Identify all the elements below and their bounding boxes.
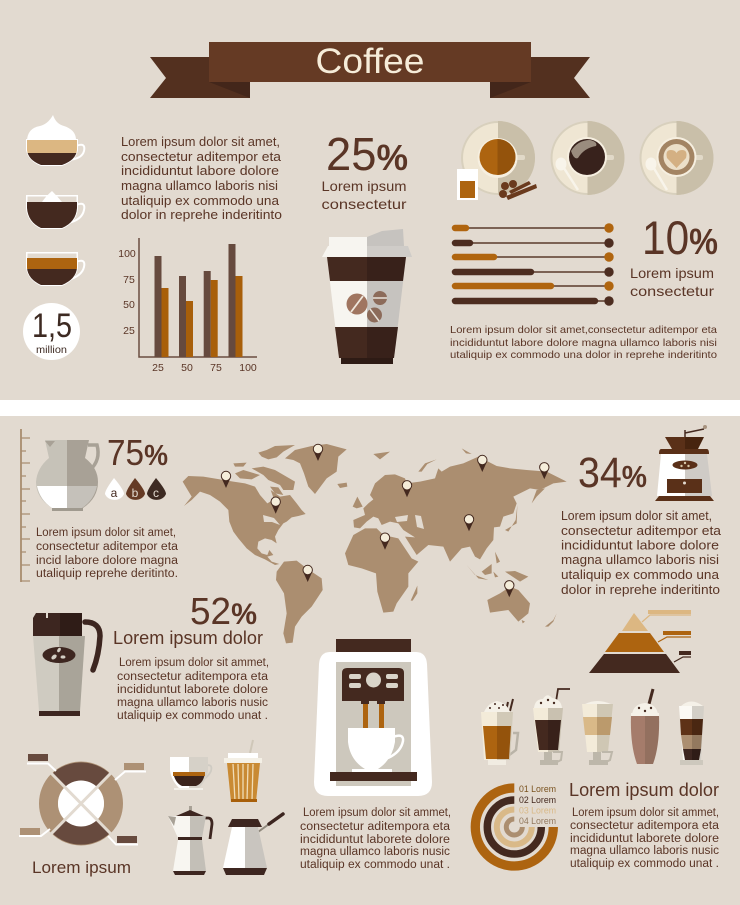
text block: 34%: dolor in reprehe inderitinto [561,583,720,597]
text block: intro [121,135,282,222]
icon: saucer with latte [640,121,714,195]
icon: a b c drops [105,478,166,500]
radial ring chart [475,788,553,866]
text block: intro: magna ullamco laboris nisi [121,179,278,193]
icon: saucer with americano [457,121,537,200]
text block: upper right: utaliquip ex commodo una dolor in reprehe inderitinto [450,349,717,361]
ring chart legend: 03 Lorem [519,806,556,816]
icon: glass 2 [533,689,570,765]
text block: 75%: utaliquip reprehe deritinto. [36,568,178,580]
text block: machine: Lorem ipsum dolor sit ammet, [303,807,451,819]
text block: machine [300,807,451,871]
bar chart: 25 [152,362,164,374]
stat: 25%: consectetur [322,196,407,212]
text block: 34%: magna ullamco laboris nisi [561,553,719,567]
stat: 10% [630,211,718,299]
bar chart: 100 [239,362,257,374]
inland seas [395,515,424,529]
icon: glass 5 [679,702,704,765]
icon: a b c drops: b [132,486,139,500]
icon: cappuccino cup [26,115,84,167]
icon: moka pot [168,806,212,875]
title banner [150,42,590,98]
text block: lower right: Lorem ipsum dolor sit ammet, [572,807,719,819]
icon: coffee machine [314,639,432,796]
text block: intro: dolor in reprehe inderitinto [121,208,282,222]
bar chart: 75 [123,274,135,286]
icon: a b c drops: a [111,486,118,500]
text block: 52% [117,657,269,722]
white divider band [0,400,740,416]
callout: 1,5 million [23,303,80,360]
bar chart [118,238,257,374]
heading and stat: 52% [113,591,263,648]
ring chart legend: 02 Lorem [519,795,556,806]
text block: 52%: Lorem ipsum dolor sit ammet, [119,657,269,669]
icon: milk jug [36,440,98,511]
text block: lower right: incididuntut laborete dolore [570,833,719,845]
slider chart [455,223,614,306]
world map [183,444,567,643]
text block: 52%: magna ullamco laboris nusic [117,697,268,709]
bar chart: 100 [118,248,136,260]
icon: takeaway cup [322,229,412,364]
stat: 25% [322,128,408,212]
text block: 52%: utaliquip ex commodo unat . [117,710,268,722]
stat: 10%: Lorem ipsum [630,265,714,281]
text block: 52%: consectetur aditempora eta [117,671,269,683]
text block: upper right: Lorem ipsum dolor sit amet,consectetur aditempor eta [450,324,717,336]
icon: glass 4 [631,689,659,764]
text block: lower right [570,807,720,870]
text block: upper right: incididuntut labore dolore magna ullamco laboris nisi [450,337,717,349]
ring chart legend: 04 Lorem [519,816,556,827]
stat: 10%: 10% [642,211,718,264]
stat: 75%: 75% [107,432,168,473]
heading: lower right: Lorem ipsum dolor [569,780,719,800]
title banner: Coffee [316,42,424,81]
bar chart: 50 [181,362,193,374]
text block: 52%: incididuntut laborete dolore [117,684,268,696]
icon: travel mug [33,613,100,716]
text block: 34%: Lorem ipsum dolor sit amet, [561,509,712,523]
text block: 75% [36,527,179,580]
text block: machine: consectetur aditempora eta [300,821,451,833]
icon: glass 1 [481,699,518,765]
stat: 25%: 25% [326,128,408,180]
text block: 34%: consectetur aditempor eta [561,524,721,538]
icon: saucer with black coffee [550,121,625,195]
text block: 75%: consectetur aditempor eta [36,541,179,553]
ruler [21,429,30,582]
text block: 34%: utaliquip ex commodo una [561,568,719,582]
text block: upper right [450,324,717,361]
callout: 1,5 million: million [36,344,67,356]
map pins [221,444,549,597]
text block: machine: magna ullamco laboris nusic [300,846,450,858]
bar chart: 25 [123,325,135,337]
text block: 34%: incididuntut labore dolore [561,538,719,552]
stat: 34%: 34% [578,449,647,497]
ring chart legend: 01 Lorem [519,784,556,795]
icon: paper cup [224,740,262,802]
stat: 10%: consectetur [630,283,714,299]
icon: espresso cup [170,757,211,790]
heading and stat: 52%: 52% [190,591,257,633]
text block: intro: Lorem ipsum dolor sit amet, [121,135,280,149]
text block: machine: incididuntut laborete dolore [300,834,450,846]
icon: dark cup with foam [26,191,84,229]
icon: glass 3 [582,701,613,765]
donut label: Lorem ipsum [32,858,131,877]
callout: 1,5 million: 1,5 [32,307,72,345]
icon: turkish coffee pot [223,814,283,875]
stat: 25%: Lorem ipsum [322,178,406,194]
heading and stat: 52%: Lorem ipsum dolor [113,628,263,648]
text block: intro: incididuntut labore dolore [121,164,279,178]
text block: 75%: Lorem ipsum dolor sit amet, [36,527,176,539]
great lakes [263,515,280,525]
text block: intro: utaliquip ex commodo una [121,194,279,208]
text block: intro: consectetur aditempor eta [121,150,281,164]
bar chart: 75 [210,362,222,374]
pyramid chart [589,610,691,673]
text block: 75%: incid labore dolore magna [36,555,179,567]
text block: machine: utaliquip ex commodo unat . [300,859,450,871]
text block: 34% [561,509,721,597]
ring chart legend [519,784,556,827]
text block: lower right: magna ullamco laboris nusic [570,845,719,857]
bar chart: 50 [123,299,135,311]
donut chart [19,754,146,845]
icon: coffee grinder [655,425,714,501]
text block: lower right: utaliquip ex commodo unat . [570,858,719,870]
text block: lower right: consectetur aditempora eta [570,820,720,832]
icon: a b c drops: c [153,486,159,500]
icon: layered cup [26,252,84,286]
